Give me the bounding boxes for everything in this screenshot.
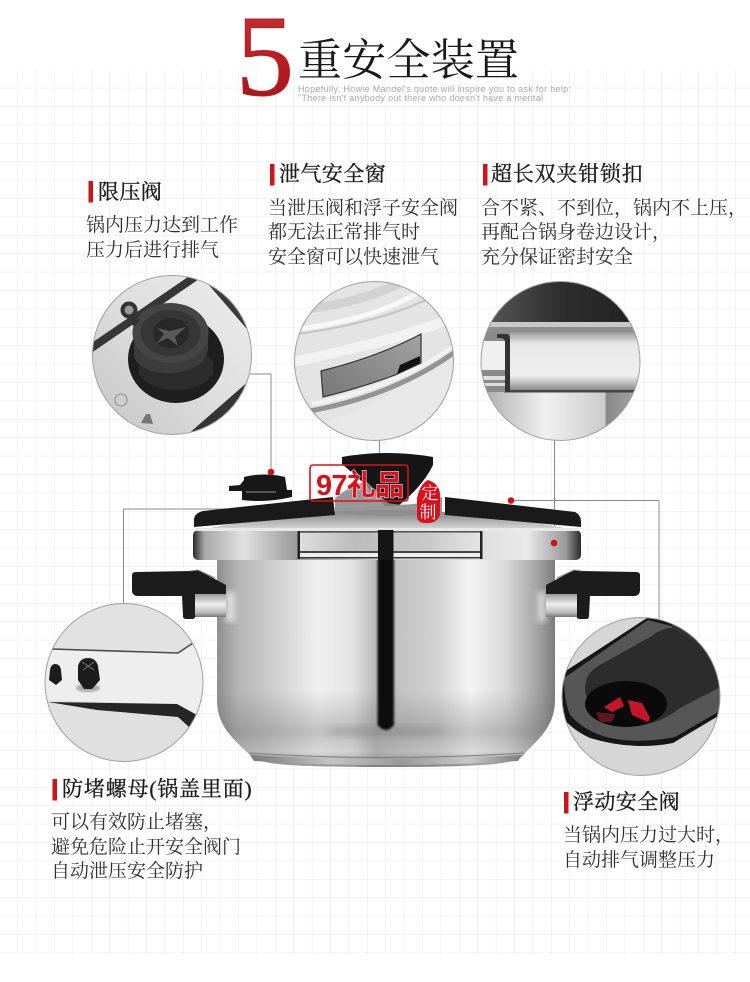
lid knob	[342, 453, 433, 506]
description: 自动排气调整压力	[563, 849, 715, 871]
description: 当泄压阀和浮子安全阀	[268, 197, 458, 219]
pot handles	[132, 570, 640, 619]
description: 当锅内压力过大时，	[563, 824, 734, 846]
title heading: 重安全装置	[298, 36, 519, 85]
description: 自动泄压安全防护	[51, 860, 203, 882]
panel: vent safety window text	[268, 162, 458, 268]
photo: vent safety window	[294, 281, 454, 441]
description: 合不紧、不到位，锅内不上压，	[481, 197, 747, 219]
title subtitle: Hopefully, Howie Mandel's quote will inspire you to ask for help:	[298, 84, 571, 94]
description: 都无法正常排气时	[268, 221, 420, 243]
description: 再配合锅身卷边设计，	[481, 221, 671, 243]
title subtitle: "There isn't anybody out there who doesn't have a mental	[298, 93, 543, 103]
description: 安全窗可以快速泄气	[268, 246, 439, 268]
connector lines	[124, 374, 659, 620]
callout dots	[268, 469, 557, 546]
panel: anti-block nut text	[51, 777, 252, 882]
photo: pressure limit valve	[92, 275, 252, 435]
watermark: 97礼品: 97礼品	[316, 469, 404, 502]
pot body	[217, 556, 555, 767]
panel: pressure limit valve text	[86, 180, 238, 261]
knob neck	[335, 481, 442, 516]
title	[236, 0, 571, 121]
watermark seal: 定制	[417, 480, 440, 523]
heading marker	[52, 779, 57, 800]
description: 锅内压力达到工作	[86, 214, 238, 236]
heading marker	[483, 164, 488, 186]
heading: 超长双夹钳锁扣	[491, 162, 643, 186]
panel: double clamp lock text	[481, 162, 747, 268]
lid black cover	[194, 497, 581, 527]
heading marker	[270, 164, 274, 186]
heading marker	[88, 181, 93, 202]
lid dome	[200, 510, 575, 530]
description: 可以有效防止堵塞，	[51, 811, 222, 833]
description: 避免危险止开安全阀门	[51, 836, 241, 858]
photo: anti-block nuts	[44, 603, 204, 762]
pressure valve on lid	[229, 474, 292, 501]
illustration: pressure cooker	[132, 453, 640, 767]
description: 压力后进行排气	[86, 239, 219, 261]
description: 充分保证密封安全	[481, 246, 633, 268]
photo: floating safety valve	[558, 616, 730, 776]
heading: 浮动安全阀	[573, 790, 680, 814]
panel: floating safety valve text	[563, 790, 734, 871]
heading: 限压阀	[98, 180, 162, 204]
heading marker	[564, 792, 568, 814]
lid rim	[193, 528, 581, 560]
heading: 防堵螺母(锅盖里面)	[62, 777, 252, 801]
heading: 泄气安全窗	[279, 162, 386, 186]
photo: double clamp lock	[480, 281, 642, 442]
title subtitle	[298, 84, 571, 103]
watermark seal: 定制: 制	[420, 503, 436, 522]
watermark seal: 定制: 定	[422, 484, 438, 503]
